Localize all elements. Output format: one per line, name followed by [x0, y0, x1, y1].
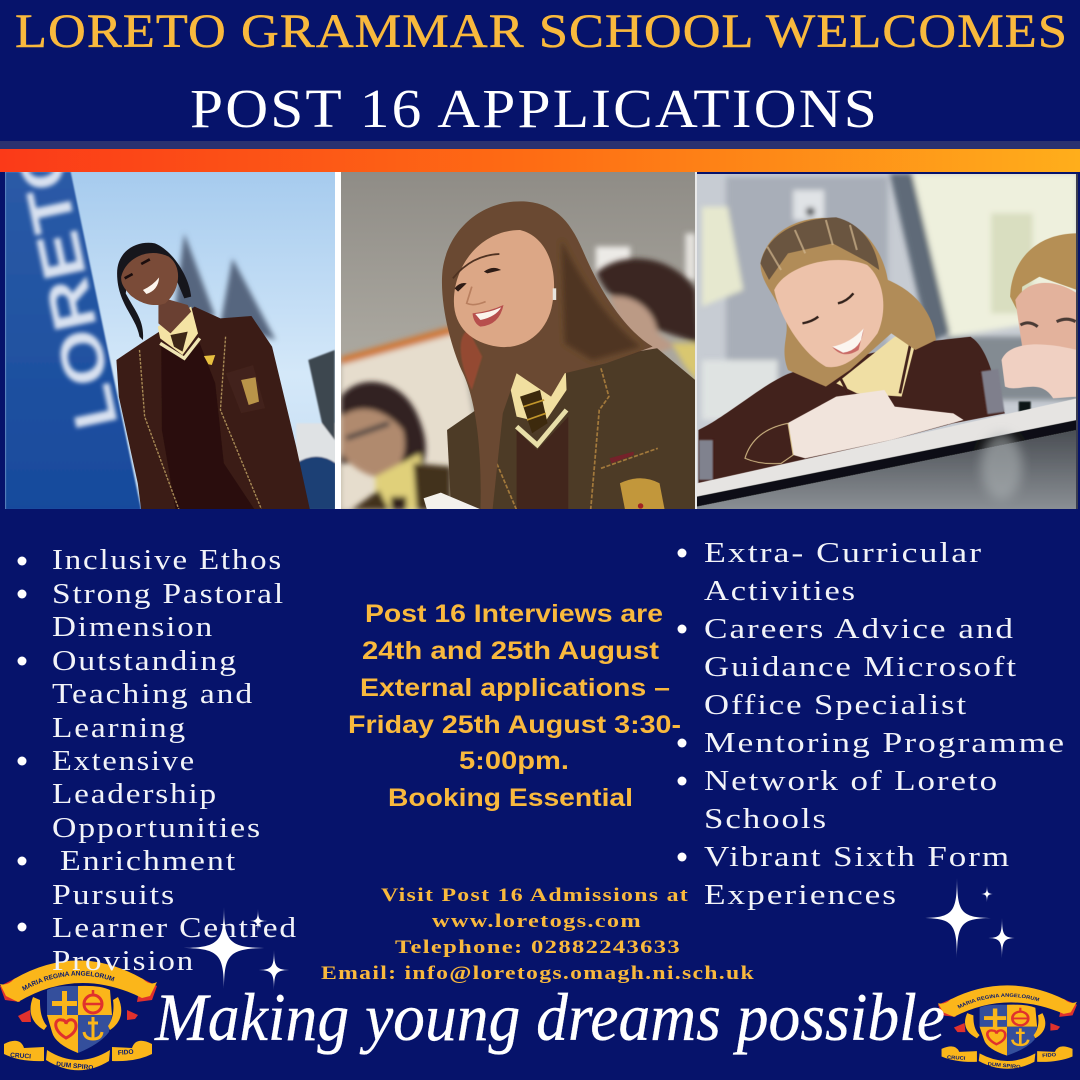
contact details: [321, 886, 755, 984]
blurred student right: [596, 259, 699, 383]
window and column: [702, 173, 1077, 420]
orb: [84, 995, 102, 1013]
sparkles right: [920, 878, 1018, 958]
hair: [442, 201, 653, 510]
crest badge: [620, 478, 665, 510]
face: [121, 253, 178, 305]
earring: [553, 288, 556, 300]
right benefits list: Guidance Microsoft: [704, 651, 1018, 683]
crest left: CRUCI: [10, 1052, 31, 1060]
shield: [47, 986, 78, 1015]
eyes and smile: [125, 259, 150, 278]
blazer piping: [139, 337, 262, 510]
sweater: [517, 417, 568, 510]
white divider 2: [695, 172, 697, 509]
right benefits list: Schools: [704, 803, 828, 835]
blurred spires: [174, 233, 276, 340]
anchor: [84, 1017, 102, 1039]
right student face: [1015, 283, 1077, 350]
left benefits list: Enrichment: [60, 845, 237, 877]
left benefits list: [18, 544, 298, 977]
subtitle: POST 16 APPLICATIONS: [190, 78, 879, 139]
slogan: Making young dreams possible: [154, 979, 945, 1055]
nose: [467, 287, 486, 305]
banner lettering: LORETO: [3, 128, 131, 435]
left benefits list: Leadership: [52, 778, 218, 810]
crest right: FIDO: [1042, 1052, 1057, 1059]
crest left: DUM SPIRO: [56, 1061, 94, 1072]
cross: [52, 991, 77, 1020]
orb: [1012, 1012, 1028, 1025]
desk: [697, 398, 1077, 497]
interview details: Post 16 Interviews are: [365, 600, 663, 628]
right benefits list: Vibrant Sixth Form: [704, 841, 1011, 873]
left benefits list: Learning: [52, 712, 187, 744]
blurred student left: [341, 382, 451, 510]
heart: [987, 1030, 1005, 1044]
collar and stripes: [158, 307, 198, 355]
contact details: Email: info@loretogs.omagh.ni.sch.uk: [321, 964, 755, 984]
blonde curls: [760, 218, 936, 387]
interview details: 24th and 25th August: [362, 637, 660, 665]
whiteboard: [341, 233, 696, 510]
interview details: [348, 600, 681, 812]
heart: [56, 1020, 76, 1038]
left benefits list: Dimension: [52, 611, 214, 643]
eyes: [802, 293, 853, 323]
supporters: [31, 997, 47, 1030]
right benefits list: [678, 537, 1066, 911]
crest left: MARIA REGINA ANGELORUM: [22, 970, 114, 991]
photo: student in science lab: [697, 173, 1077, 510]
left benefits list: Learner Centred: [52, 912, 298, 944]
smile: [473, 305, 504, 327]
right benefits list: Extra- Curricular: [704, 537, 983, 569]
right benefits list: Careers Advice and: [704, 613, 1015, 645]
right benefits list: Experiences: [704, 879, 898, 911]
motto banners: [942, 1046, 977, 1062]
papers: [424, 493, 482, 510]
left benefits list: Strong Pastoral: [52, 578, 285, 610]
crest right: MARIA REGINA ANGELORUM: [957, 993, 1040, 1008]
blazer lapel piping: [492, 368, 609, 510]
sparkles left: [180, 907, 292, 990]
building and car: [296, 350, 336, 510]
face: [774, 260, 883, 367]
blazer: [447, 348, 703, 510]
left benefits list: Opportunities: [52, 812, 262, 844]
contact details: Telephone: 02882243633: [395, 938, 681, 958]
header strip and gradient bar: [0, 141, 1080, 172]
shield: [980, 1005, 1007, 1027]
contact details: Visit Post 16 Admissions at: [381, 886, 689, 906]
right student hand: [1001, 344, 1077, 398]
sweater: [161, 343, 255, 510]
hair: [117, 243, 191, 340]
interview details: Friday 25th August 3:30-: [348, 711, 681, 739]
left benefits list: Outstanding: [52, 645, 238, 677]
right benefits list: Mentoring Programme: [704, 727, 1066, 759]
photo: student outside Loreto banner: [5, 172, 335, 509]
left benefits list: Inclusive Ethos: [52, 544, 283, 576]
left benefits list: Pursuits: [52, 879, 176, 911]
crest right: CRUCI: [947, 1055, 966, 1062]
gloves: [787, 390, 964, 458]
contact details: www.loretogs.com: [432, 912, 642, 932]
pocket and badge: [242, 378, 258, 405]
white divider: [335, 172, 341, 509]
photo right edge: [1076, 174, 1078, 509]
left benefits list: Extensive: [52, 745, 196, 777]
crest left: FIDO: [118, 1049, 134, 1057]
anchor: [1012, 1028, 1028, 1045]
braids on crown: [760, 217, 879, 280]
right benefits list: Activities: [704, 575, 857, 607]
collar and stripes: [510, 373, 566, 420]
interview details: External applications –: [360, 674, 670, 702]
crest right: DUM SPIRO: [987, 1062, 1021, 1070]
neck: [158, 297, 191, 333]
collar: [836, 337, 917, 397]
motto banners: [4, 1041, 44, 1061]
supporters: [965, 1013, 980, 1038]
cardigan: [698, 337, 1005, 483]
smile: [832, 328, 864, 353]
right benefits list: Network of Loreto: [704, 765, 999, 797]
interview details: 5:00pm.: [459, 747, 569, 775]
blue Loreto banner: [5, 172, 141, 510]
face: [454, 230, 554, 347]
cross: [984, 1009, 1006, 1031]
eyes and brows: [453, 254, 499, 278]
interview details: Booking Essential: [388, 784, 633, 812]
blazer: [116, 307, 310, 510]
left benefits list: Teaching and: [52, 678, 254, 710]
crest left: [0, 960, 157, 1072]
right student hair: [1010, 233, 1077, 317]
photo: smiling student in classroom: [341, 172, 703, 510]
title: LORETO GRAMMAR SCHOOL WELCOMES: [15, 5, 1068, 58]
crest right: [938, 985, 1077, 1070]
right benefits list: Office Specialist: [704, 689, 968, 721]
vials: [699, 369, 1031, 480]
left benefits list: Provision: [52, 945, 195, 977]
